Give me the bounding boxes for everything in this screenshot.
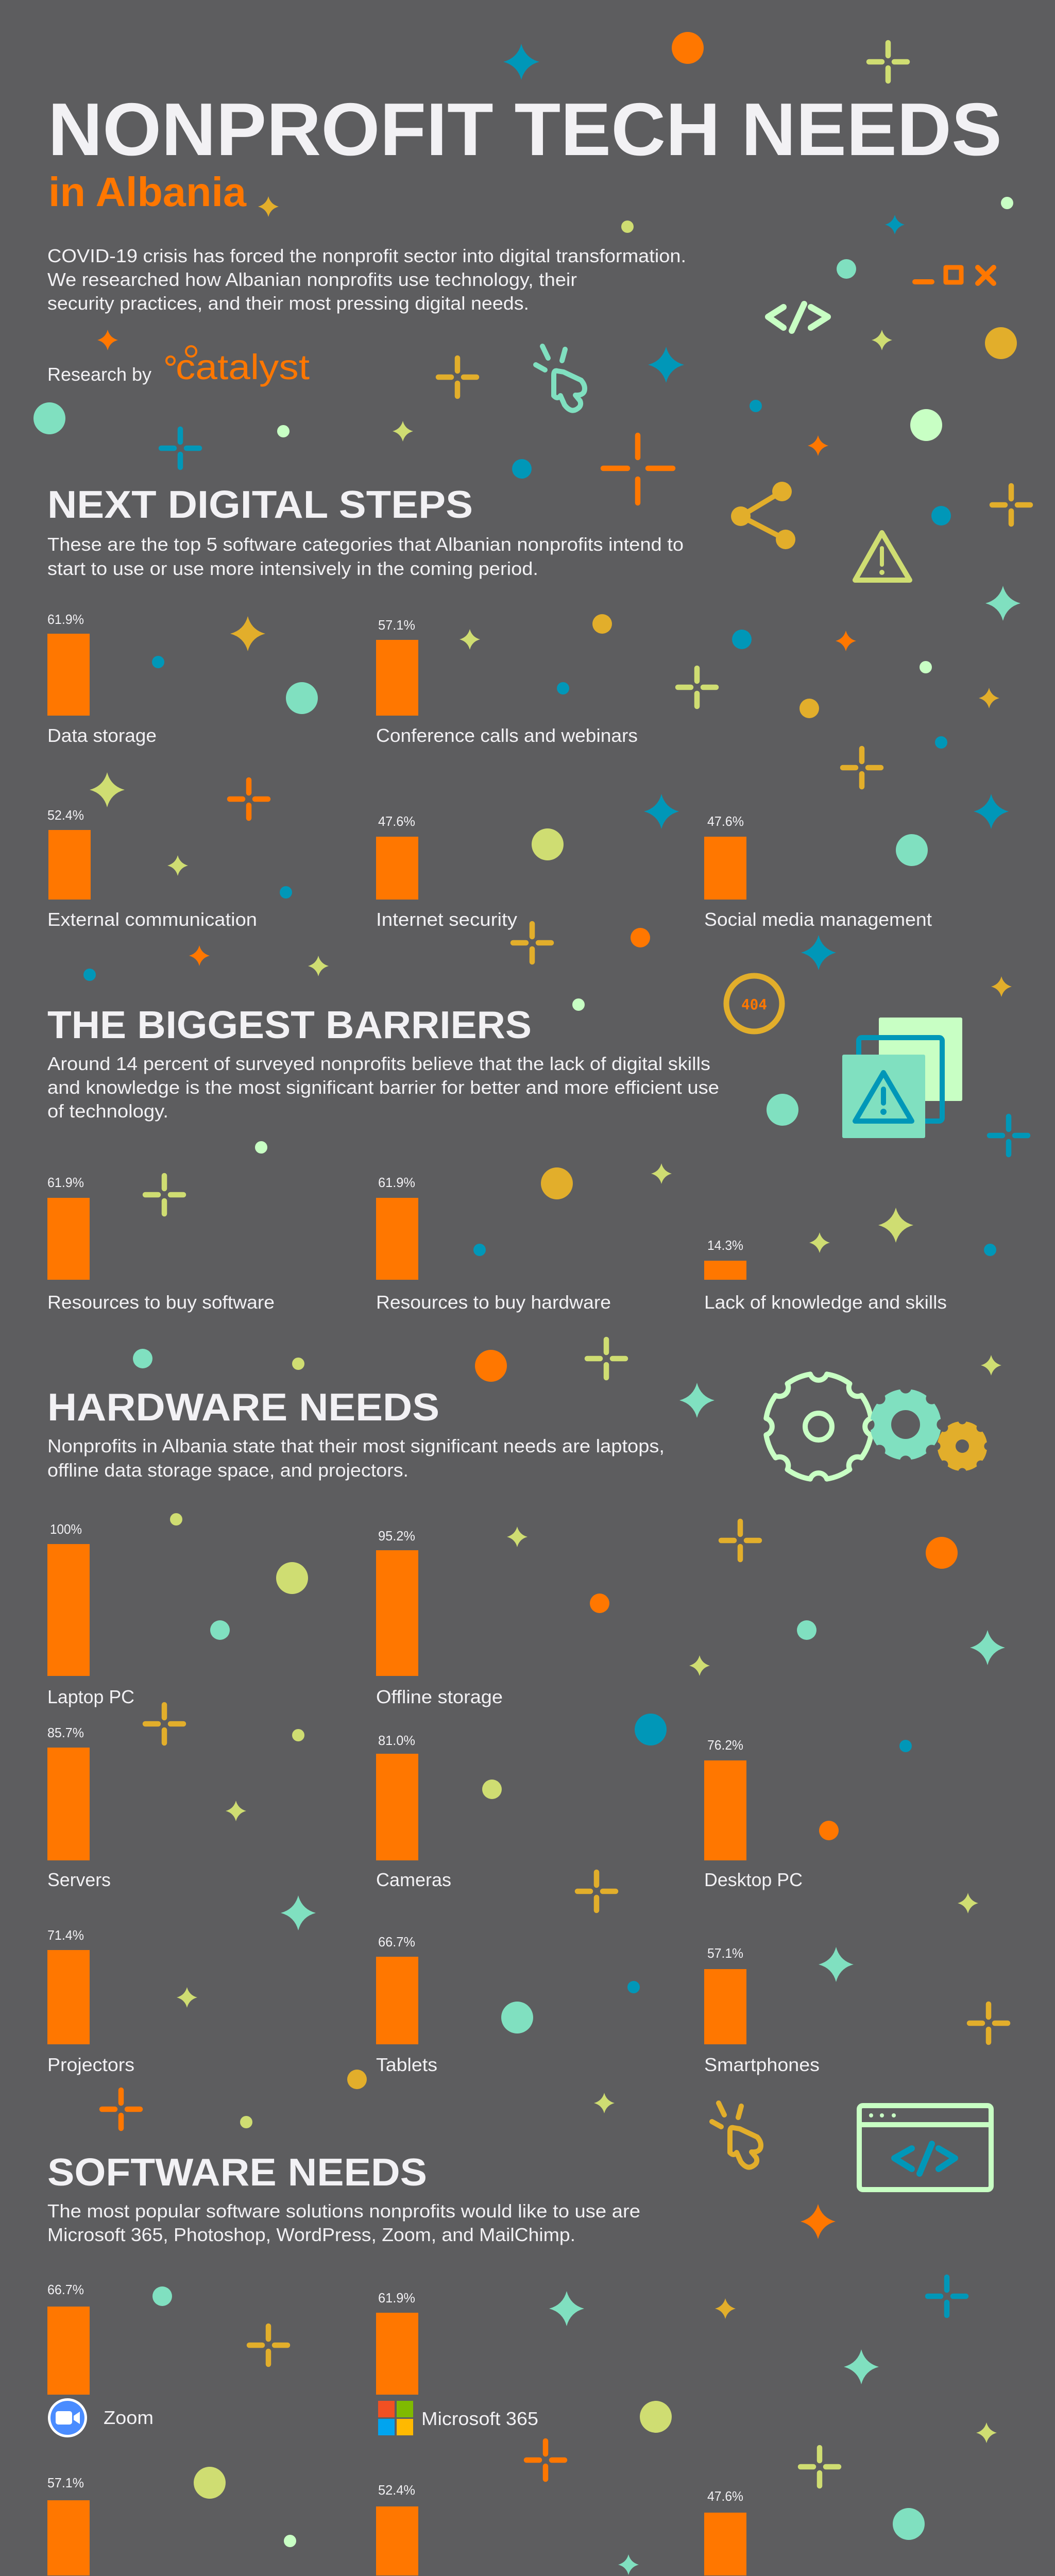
bar: servers: 85.7% — [47, 1725, 84, 1740]
bar: software resources — [47, 1175, 275, 1313]
bar: desktop — [704, 1737, 803, 1890]
bar: tablets — [376, 1934, 437, 2075]
bar: cameras: Cameras — [376, 1869, 451, 1890]
intro text: security practices, and their most pressing digital needs. — [47, 293, 529, 314]
description: Nonprofits in Albania state that their most significant needs are laptops, — [47, 1435, 665, 1456]
bar: desktop: Desktop PC — [704, 1869, 803, 1890]
bar: laptop: Laptop PC — [47, 1686, 134, 1707]
description: of technology. — [47, 1100, 168, 1122]
bar: internet security: Internet security — [376, 909, 517, 930]
bar: external communication — [47, 807, 257, 930]
bar: projectors: Projectors — [47, 2054, 134, 2075]
bar: hardware resources — [376, 1175, 611, 1313]
bar: wordpress — [47, 2475, 197, 2576]
panel: header — [47, 88, 1002, 411]
bar: photoshop: 52.4% — [378, 2482, 415, 2498]
bar: internet security: 47.6% — [378, 814, 415, 829]
bar: external communication: 52.4% — [47, 807, 84, 823]
bar: servers: Servers — [47, 1869, 111, 1890]
icon: cursor click gold — [712, 2103, 761, 2167]
bar: conference calls — [376, 617, 638, 746]
panel: software needs — [47, 2103, 991, 2576]
bar: photoshop — [376, 2482, 517, 2576]
heading: NEXT DIGITAL STEPS — [47, 483, 473, 526]
bar: cameras: 81.0% — [378, 1733, 415, 1748]
bar: zoom — [47, 2282, 154, 2437]
icon: 404 ring: 404 — [741, 996, 767, 1013]
icon: window controls — [915, 267, 994, 283]
bar: hardware resources: Resources to buy hardware — [376, 1292, 611, 1313]
icon: code brackets — [768, 304, 828, 331]
icon: code window — [859, 2106, 991, 2190]
bar: projectors: 71.4% — [47, 1927, 84, 1943]
heading: SOFTWARE NEEDS — [47, 2150, 427, 2194]
description: offline data storage space, and projectors. — [47, 1460, 409, 1481]
bar: data storage: Data storage — [47, 725, 157, 746]
bar: zoom: 66.7% — [47, 2282, 84, 2297]
bar: data storage: 61.9% — [47, 612, 84, 627]
panel: hardware needs — [47, 1374, 987, 2075]
bar: internet security — [376, 814, 517, 930]
bar: software resources: 61.9% — [47, 1175, 84, 1190]
bar: smartphones: Smartphones — [704, 2054, 820, 2075]
bar: smartphones: 57.1% — [707, 1945, 743, 1961]
description — [47, 1435, 665, 1481]
icon: gears — [766, 1374, 987, 1479]
panel: biggest barriers — [47, 976, 962, 1313]
logo: catalyst: catalyst — [176, 347, 310, 387]
bar: offline storage: 95.2% — [378, 1528, 415, 1544]
heading: HARDWARE NEEDS — [47, 1385, 439, 1429]
bar: conference calls: Conference calls and webinars — [376, 725, 638, 746]
bar: desktop: 76.2% — [707, 1737, 743, 1753]
icon: 404 ring — [726, 976, 782, 1031]
bar: teams — [704, 2488, 899, 2576]
description — [47, 1053, 719, 1122]
bar: tablets: Tablets — [376, 2054, 437, 2075]
bar: microsoft 365: Microsoft 365 — [421, 2408, 538, 2429]
bar: knowledge and skills — [704, 1238, 947, 1313]
bar: laptop: 100% — [50, 1521, 82, 1537]
bar: microsoft 365: 61.9% — [378, 2290, 415, 2306]
bar: teams: 47.6% — [707, 2488, 743, 2504]
heading: THE BIGGEST BARRIERS — [47, 1003, 532, 1046]
bar: servers — [47, 1725, 111, 1890]
bar: offline storage — [376, 1528, 503, 1707]
bar: cameras — [376, 1733, 451, 1890]
bar: hardware resources: 61.9% — [378, 1175, 415, 1190]
subtitle: in Albania — [48, 169, 247, 215]
bar: social media: 47.6% — [707, 814, 744, 829]
bar: knowledge and skills: 14.3% — [707, 1238, 743, 1253]
intro text — [47, 245, 686, 314]
description: Around 14 percent of surveyed nonprofits believe that the lack of digital skills — [47, 1053, 710, 1074]
description: These are the top 5 software categories that Albanian nonprofits intend to — [47, 534, 684, 555]
description: and knowledge is the most significant barrier for better and more efficient use — [47, 1077, 719, 1098]
intro text: We researched how Albanian nonprofits use technology, their — [47, 269, 577, 290]
icon: warning documents — [842, 1018, 962, 1138]
bar: external communication: External communication — [47, 909, 257, 930]
description: The most popular software solutions nonprofits would like to use are — [47, 2200, 640, 2222]
bar: tablets: 66.7% — [378, 1934, 415, 1950]
bar: software resources: Resources to buy software — [47, 1292, 275, 1313]
icon: share — [731, 482, 795, 549]
bar: conference calls: 57.1% — [378, 617, 415, 633]
bar: projectors — [47, 1927, 134, 2075]
intro text: COVID-19 crisis has forced the nonprofit sector into digital transformation. — [47, 245, 686, 266]
icon: cursor click — [536, 346, 585, 411]
panel: next digital steps — [47, 482, 932, 930]
bar: knowledge and skills: Lack of knowledge and skills — [704, 1292, 947, 1313]
icon: warning — [855, 533, 910, 580]
description — [47, 534, 684, 579]
bar: social media — [704, 814, 932, 930]
description: Microsoft 365, Photoshop, WordPress, Zoom, and MailChimp. — [47, 2224, 575, 2245]
description — [47, 2200, 640, 2245]
bar: social media: Social media management — [704, 909, 932, 930]
research credit: Research by — [47, 364, 151, 385]
bar: offline storage: Offline storage — [376, 1686, 503, 1707]
bar: wordpress: 57.1% — [47, 2475, 84, 2490]
bar: laptop — [47, 1521, 134, 1707]
bar: zoom: Zoom — [104, 2407, 154, 2428]
description: start to use or use more intensively in the coming period. — [47, 558, 538, 579]
bar: data storage — [47, 612, 157, 746]
bar: microsoft 365 — [376, 2290, 538, 2435]
title: NONPROFIT TECH NEEDS — [48, 88, 1002, 171]
bar: smartphones — [704, 1945, 820, 2075]
